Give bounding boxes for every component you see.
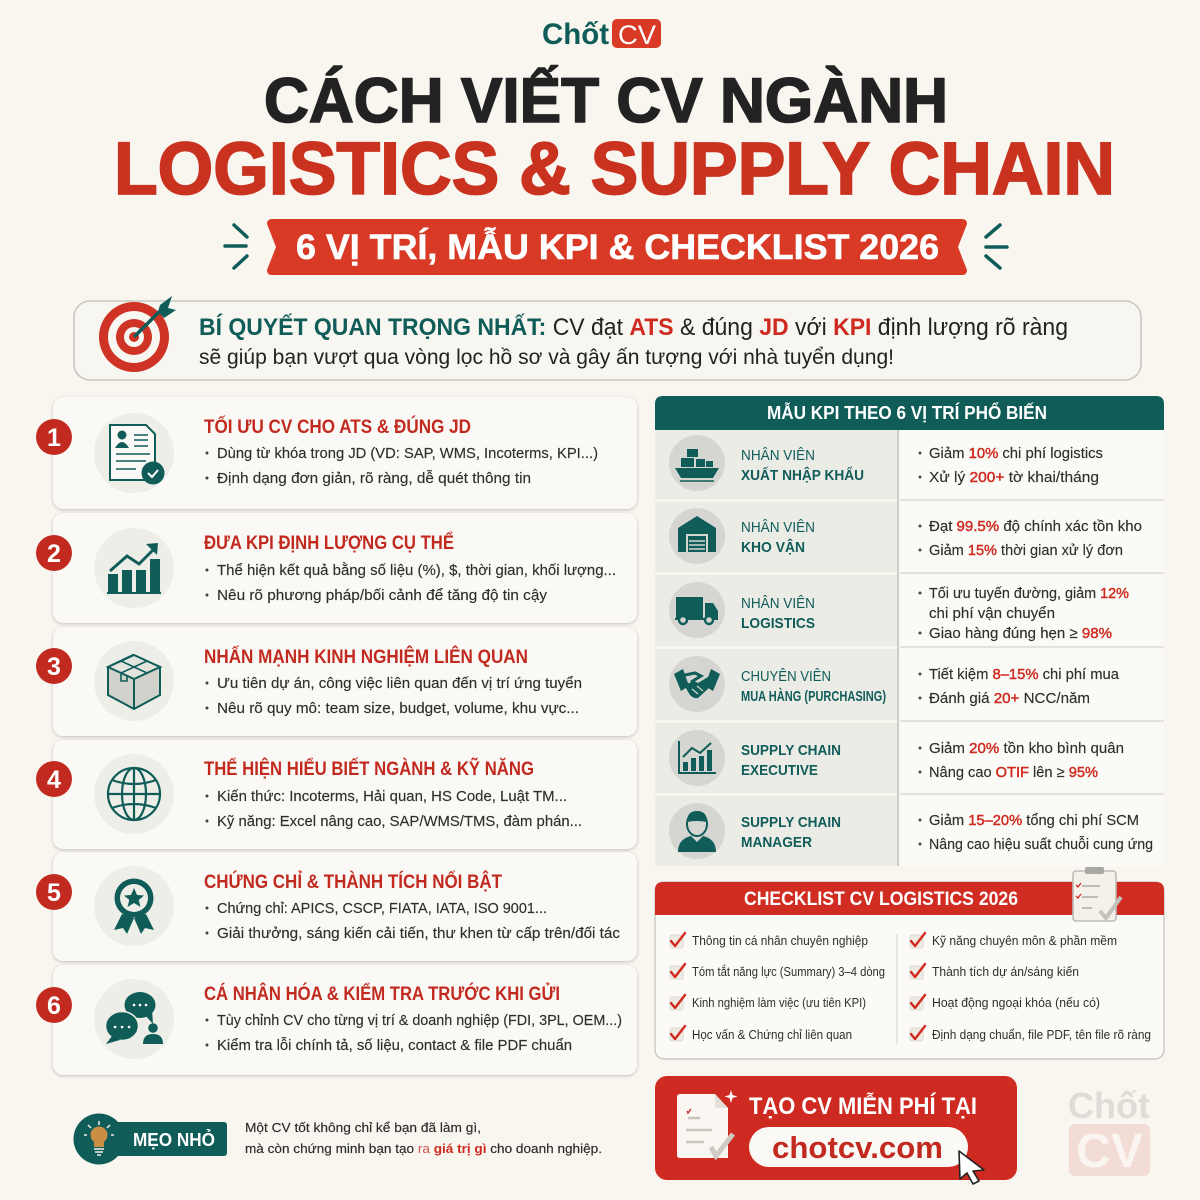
watermark logo: Chốt bbox=[1068, 1085, 1150, 1126]
checklist items right bbox=[932, 934, 1151, 1042]
step text bbox=[204, 416, 598, 487]
checklist items right: Định dạng chuẩn, file PDF, tên file rõ ràng bbox=[932, 1028, 1151, 1042]
checklist items left: Thông tin cá nhân chuyên nghiệp bbox=[692, 934, 868, 948]
step text: Tùy chỉnh CV cho từng vị trí & doanh nghiệp (FDI, 3PL, OEM...) bbox=[217, 1012, 622, 1029]
KPI row 4: purchasing handshake: Đánh giá 20+ NCC/năm bbox=[929, 690, 1090, 707]
step text: THỂ HIỆN HIỂU BIẾT NGÀNH & KỸ NĂNG bbox=[204, 758, 534, 780]
callout text bbox=[199, 313, 1068, 369]
KPI row 6: supply chain manager bbox=[669, 803, 1153, 859]
icon: growth chart bbox=[94, 528, 174, 608]
KPI row 2: warehouse: Đạt 99.5% độ chính xác tồn kho bbox=[929, 518, 1142, 535]
watermark logo: CV bbox=[1076, 1125, 1143, 1178]
icon: target with arrow bbox=[99, 296, 176, 372]
panel: checklist bbox=[655, 867, 1164, 1059]
icon: award ribbon bbox=[94, 866, 174, 946]
panel: step 6 bbox=[36, 965, 637, 1075]
KPI row 1: import-export: Xử lý 200+ tờ khai/tháng bbox=[929, 469, 1099, 486]
KPI row 5: supply chain executive: Giảm 20% tồn kho bình quân bbox=[929, 740, 1124, 757]
KPI row 2: warehouse: NHÂN VIÊN bbox=[741, 519, 815, 536]
checklist boxes left bbox=[670, 933, 685, 1041]
number badge 1 bbox=[36, 419, 72, 455]
call to action panel: TẠO CV MIỄN PHÍ TẠI bbox=[749, 1091, 977, 1120]
step text: Kiểm tra lỗi chính tả, số liệu, contact & file PDF chuẩn bbox=[217, 1037, 572, 1054]
KPI header bbox=[655, 396, 1164, 430]
subtitle ribbon bbox=[267, 219, 967, 275]
ribbon accent ticks bbox=[225, 225, 1007, 268]
checklist items left: Tóm tắt năng lực (Summary) 3–4 dòng bbox=[692, 964, 885, 979]
step text: TỐI ƯU CV CHO ATS & ĐÚNG JD bbox=[204, 416, 471, 438]
icon: cursor bbox=[959, 1151, 984, 1184]
step text: Nêu rõ phương pháp/bối cảnh để tăng độ tin cậy bbox=[217, 587, 548, 604]
number badge 5: 5 bbox=[47, 879, 61, 907]
checklist items right: Thành tích dự án/sáng kiến bbox=[932, 965, 1079, 979]
KPI row 2: warehouse: Giảm 15% thời gian xử lý đơn bbox=[929, 542, 1123, 559]
KPI row 3: logistics truck: Giao hàng đúng hẹn ≥ 98% bbox=[929, 625, 1112, 642]
title: CÁCH VIẾT CV NGÀNH bbox=[264, 65, 948, 136]
step text: Thể hiện kết quả bằng số liệu (%), $, thời gian, khối lượng... bbox=[217, 562, 616, 579]
tip badge bbox=[74, 1114, 227, 1164]
icon: chat bubbles and person bbox=[94, 979, 174, 1059]
checklist items right: Kỹ năng chuyên môn & phần mềm bbox=[932, 934, 1117, 948]
icon: CV document with check bbox=[94, 413, 174, 493]
checklist items left: Kinh nghiệm làm việc (ưu tiên KPI) bbox=[692, 996, 866, 1010]
step text: Chứng chỉ: APICS, CSCP, FIATA, IATA, ISO 9001... bbox=[217, 900, 547, 917]
icon: parcel box bbox=[94, 641, 174, 721]
tip text bbox=[245, 1120, 602, 1156]
website pill bbox=[749, 1127, 968, 1167]
KPI row 4: purchasing handshake: MUA HÀNG (PURCHASING) bbox=[741, 688, 886, 705]
checklist items right: Hoạt động ngoại khóa (nếu có) bbox=[932, 996, 1100, 1010]
KPI row 5: supply chain executive: SUPPLY CHAIN bbox=[741, 742, 841, 759]
KPI row 1: import-export: Giảm 10% chi phí logistics bbox=[929, 445, 1103, 462]
callout text: sẽ giúp bạn vượt qua vòng lọc hồ sơ và gây ấn tượng với nhà tuyển dụng! bbox=[199, 346, 894, 369]
number badge 2: 2 bbox=[47, 540, 61, 568]
call to action panel bbox=[655, 1076, 1017, 1184]
tip badge: MẸO NHỎ bbox=[133, 1129, 215, 1150]
step text: CHỨNG CHỈ & THÀNH TÍCH NỔI BẬT bbox=[204, 871, 502, 893]
KPI header: MẪU KPI THEO 6 VỊ TRÍ PHỔ BIẾN bbox=[767, 402, 1047, 423]
KPI row 6: supply chain manager: MANAGER bbox=[741, 834, 812, 851]
KPI row 3: logistics truck: Tối ưu tuyến đường, giảm 12% bbox=[929, 585, 1129, 602]
step text: Ưu tiên dự án, công việc liên quan đến vị trí ứng tuyển bbox=[217, 675, 582, 692]
panel: KPI table bbox=[655, 396, 1164, 866]
KPI row 3: logistics truck: chi phí vận chuyển bbox=[929, 605, 1055, 622]
KPI row backgrounds bbox=[655, 430, 1164, 866]
number badge 5 bbox=[36, 874, 72, 910]
panel: step 3 bbox=[36, 627, 637, 736]
number badge 4: 4 bbox=[47, 766, 61, 794]
KPI row 1: import-export: XUẤT NHẬP KHẨU bbox=[741, 466, 864, 484]
step text: Dùng từ khóa trong JD (VD: SAP, WMS, Incoterms, KPI...) bbox=[217, 445, 598, 462]
icon: light bulb bbox=[84, 1121, 114, 1155]
KPI row 4: purchasing handshake bbox=[669, 656, 1120, 712]
KPI row 1: import-export bbox=[669, 435, 1103, 491]
watermark logo bbox=[1068, 1085, 1150, 1178]
number badge 2 bbox=[36, 535, 72, 571]
KPI row 6: supply chain manager: SUPPLY CHAIN bbox=[741, 814, 841, 831]
number badge 6 bbox=[36, 987, 72, 1023]
number badge 3: 3 bbox=[47, 653, 61, 681]
step text: Nêu rõ quy mô: team size, budget, volume, khu vực... bbox=[217, 700, 579, 717]
number badge 4 bbox=[36, 761, 72, 797]
KPI row 3: logistics truck: LOGISTICS bbox=[741, 615, 815, 632]
title bbox=[114, 65, 1115, 210]
KPI row 5: supply chain executive: Nâng cao OTIF lên ≥ 95% bbox=[929, 764, 1098, 781]
step text bbox=[204, 532, 616, 604]
KPI row 4: purchasing handshake: Tiết kiệm 8–15% chi phí mua bbox=[929, 666, 1120, 683]
number badge 1: 1 bbox=[47, 424, 61, 452]
icon: CV document with check bbox=[677, 1090, 738, 1158]
logo: Chốt CV bbox=[542, 18, 661, 51]
step text bbox=[204, 871, 621, 942]
step text bbox=[204, 983, 622, 1054]
KPI row 4: purchasing handshake: CHUYÊN VIÊN bbox=[741, 668, 831, 685]
KPI row 3: logistics truck: NHÂN VIÊN bbox=[741, 595, 815, 612]
step text: CÁ NHÂN HÓA & KIỂM TRA TRƯỚC KHI GỬI bbox=[204, 983, 560, 1005]
KPI row 6: supply chain manager: Nâng cao hiệu suất chuỗi cung ứng bbox=[929, 836, 1153, 853]
website pill: chotcv.com bbox=[772, 1130, 943, 1165]
icon: globe bbox=[94, 754, 174, 834]
checklist items left: Học vấn & Chứng chỉ liên quan bbox=[692, 1028, 852, 1042]
logo: Chốt CV: CV bbox=[618, 20, 656, 50]
KPI row 5: supply chain executive: EXECUTIVE bbox=[741, 762, 818, 779]
KPI row 2: warehouse: KHO VẬN bbox=[741, 538, 805, 556]
panel: step 2 bbox=[36, 513, 637, 623]
number badge 3 bbox=[36, 648, 72, 684]
checklist header: CHECKLIST CV LOGISTICS 2026 bbox=[744, 889, 1018, 910]
step text: ĐƯA KPI ĐỊNH LƯỢNG CỤ THỂ bbox=[204, 532, 454, 554]
panel: step 4 bbox=[36, 740, 637, 849]
subtitle ribbon: 6 VỊ TRÍ, MẪU KPI & CHECKLIST 2026 bbox=[296, 227, 939, 267]
callout text: BÍ QUYẾT QUAN TRỌNG NHẤT: CV đạt ATS & đúng JD với KPI định lượng rõ ràng bbox=[199, 313, 1068, 341]
step text bbox=[204, 758, 582, 830]
icon: clipboard bbox=[1073, 867, 1121, 921]
step text: Định dạng đơn giản, rõ ràng, dễ quét thông tin bbox=[217, 470, 531, 487]
callout: key secret bbox=[74, 296, 1141, 380]
KPI row 3: logistics truck bbox=[669, 582, 1129, 642]
logo: Chốt CV: Chốt bbox=[542, 18, 609, 51]
step text: NHẤN MẠNH KINH NGHIỆM LIÊN QUAN bbox=[204, 646, 528, 668]
tip text: mà còn chứng minh bạn tạo ra giá trị gì cho doanh nghiệp. bbox=[245, 1141, 602, 1156]
step text: Kiến thức: Incoterms, Hải quan, HS Code, Luật TM... bbox=[217, 788, 567, 805]
tip text: Một CV tốt không chỉ kể bạn đã làm gì, bbox=[245, 1120, 481, 1135]
KPI row 1: import-export: NHÂN VIÊN bbox=[741, 447, 815, 464]
step text: Giải thưởng, sáng kiến cải tiến, thư khen từ cấp trên/đối tác bbox=[217, 925, 621, 942]
KPI row 6: supply chain manager: Giảm 15–20% tổng chi phí SCM bbox=[929, 812, 1139, 829]
checklist header bbox=[655, 882, 1164, 915]
checklist items left bbox=[692, 934, 885, 1042]
KPI row 2: warehouse bbox=[669, 508, 1142, 564]
panel: step 1 bbox=[36, 397, 637, 509]
number badge 6: 6 bbox=[47, 992, 61, 1020]
panel: step 5 bbox=[36, 852, 637, 961]
KPI row 5: supply chain executive bbox=[669, 730, 1124, 786]
checklist boxes right bbox=[910, 933, 925, 1041]
step text bbox=[204, 646, 582, 717]
title: LOGISTICS & SUPPLY CHAIN bbox=[114, 127, 1115, 210]
step text: Kỹ năng: Excel nâng cao, SAP/WMS/TMS, đàm phán... bbox=[217, 813, 582, 830]
